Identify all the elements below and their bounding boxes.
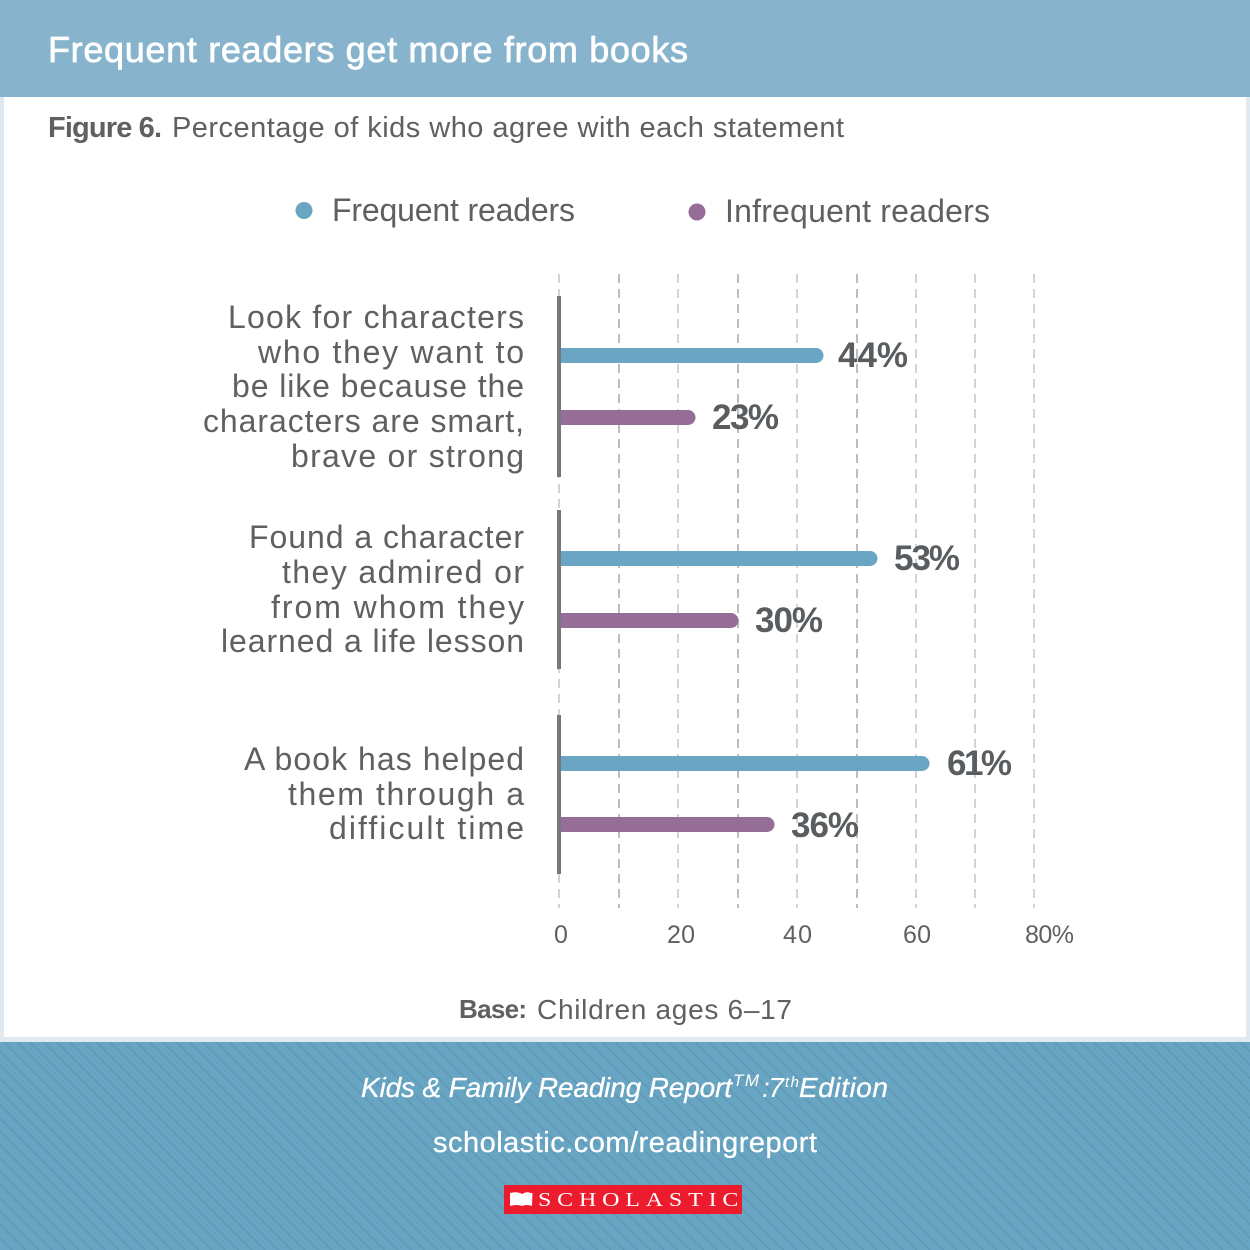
group 3: difficult time xyxy=(244,715,1012,874)
group 1 label: Look for characters xyxy=(228,299,524,335)
group 2 label xyxy=(221,519,524,659)
report title: Kids & Family Reading Report xyxy=(361,1072,733,1103)
group 1: characters smart, brave or strong xyxy=(203,296,908,477)
x axis labels: 0 xyxy=(554,921,568,949)
group 3 label xyxy=(244,741,524,846)
base note: Children ages 6–17 xyxy=(537,994,792,1025)
x axis labels: 60 xyxy=(903,921,931,949)
legend xyxy=(296,192,990,229)
group 3 label: difficult time xyxy=(329,810,524,846)
group 3: difficult time: 36% xyxy=(791,806,859,845)
x axis labels: 80% xyxy=(1025,921,1074,949)
group 2 label: Found a character xyxy=(249,519,524,555)
group 1: characters smart, brave or strong: 44% xyxy=(838,336,908,375)
legend: Infrequent readers xyxy=(725,193,990,229)
group 3 label: them through a xyxy=(288,776,524,812)
legend: Frequent readers xyxy=(332,192,575,228)
scholastic logo: SCHOLASTIC xyxy=(538,1188,738,1211)
scholastic logo xyxy=(504,1185,742,1214)
group 1 label xyxy=(203,299,524,474)
report title: th xyxy=(785,1074,799,1091)
group 3 label: A book has helped xyxy=(244,741,524,777)
figure caption: Percentage of kids who agree with each statement xyxy=(172,112,844,144)
group 1 label: who they want to xyxy=(257,334,524,370)
group 2 label: they admired or xyxy=(282,554,524,590)
group 1 label: characters are smart, xyxy=(203,403,524,439)
group 1 label: brave or strong xyxy=(291,438,524,474)
report title: :7 xyxy=(762,1072,785,1103)
group 1: characters smart, brave or strong: 23% xyxy=(712,398,779,437)
group 2: admired character: 53% xyxy=(894,539,960,578)
group 1 label: be like because the xyxy=(232,368,524,404)
group 3: difficult time: 61% xyxy=(947,744,1012,783)
group 2 label: from whom they xyxy=(271,589,524,625)
base note: Base: xyxy=(459,994,527,1024)
title: Frequent readers get more from books xyxy=(48,29,688,70)
report url: scholastic.com/readingreport xyxy=(433,1127,817,1159)
figure caption: Figure 6. xyxy=(48,112,162,144)
x axis labels: 20 xyxy=(667,921,695,949)
group 2 label: learned a life lesson xyxy=(221,623,524,659)
x axis labels xyxy=(554,921,1074,949)
group 2: admired character xyxy=(221,510,960,669)
report title xyxy=(361,1071,888,1103)
group 2: admired character: 30% xyxy=(755,601,823,640)
header banner xyxy=(0,0,1250,97)
report title: Edition xyxy=(799,1072,888,1103)
report title: TM xyxy=(733,1071,760,1090)
x axis labels: 40 xyxy=(783,921,812,949)
footer xyxy=(0,1042,1250,1250)
